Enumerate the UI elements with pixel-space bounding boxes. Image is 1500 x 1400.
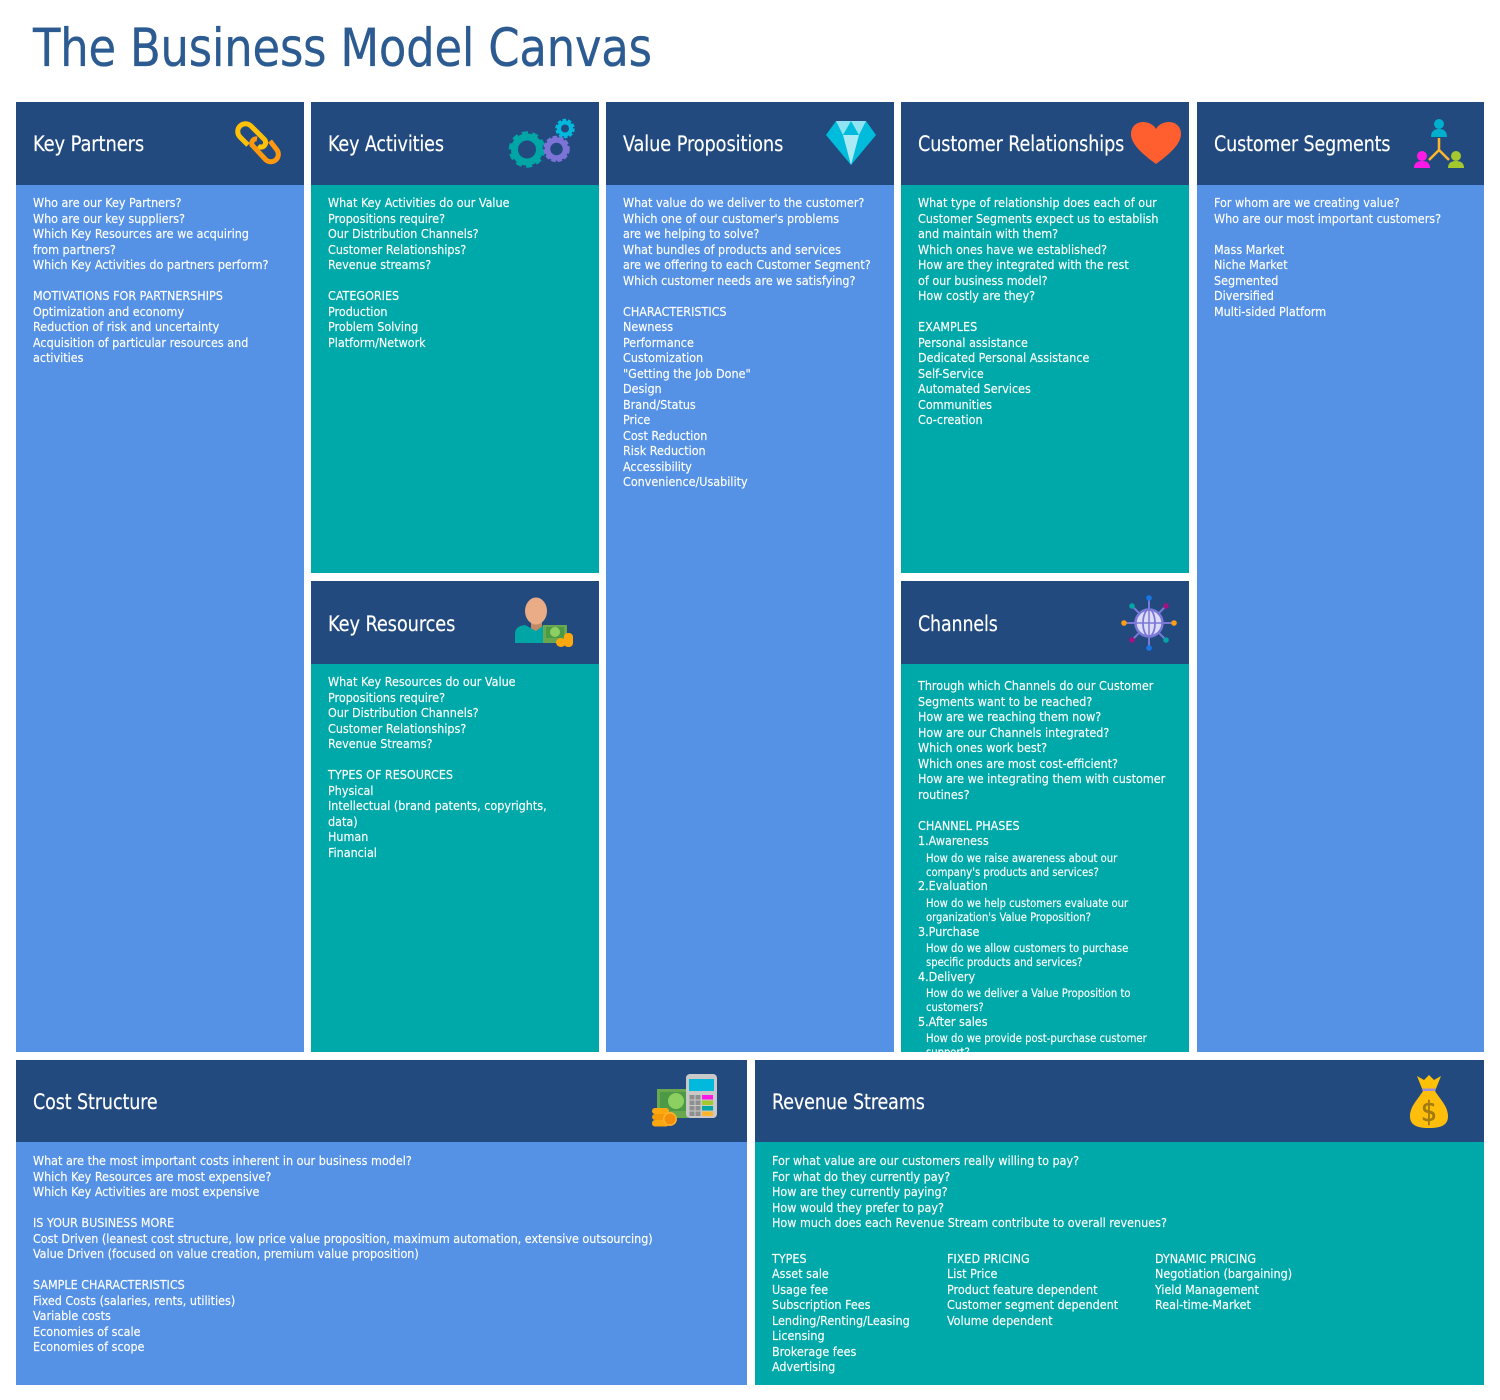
text: customer segments: For whom are we creating value? Who are our most important customers? Mass Market Niche Market Segmented Diversified Multi-sided Platform xyxy=(1214,195,1441,318)
header: customer relationships: Customer Relationships xyxy=(918,132,1124,156)
panel: key resources xyxy=(311,581,599,1052)
header: key resources xyxy=(311,581,599,664)
header: channels: Channels xyxy=(918,612,998,636)
header: cost structure xyxy=(16,1060,747,1142)
icon: calculator and money xyxy=(652,1074,717,1126)
text: phase 2 detail: How do we help customers evaluate our organization's Value Proposition? xyxy=(926,897,1128,924)
text: phase 5: 5.After sales xyxy=(918,1014,988,1029)
text: phase 3: 3.Purchase xyxy=(918,924,979,939)
header: key activities xyxy=(311,102,599,185)
panel: key activities xyxy=(311,102,599,573)
panel: value propositions xyxy=(606,102,894,1052)
header: cost structure: Cost Structure xyxy=(33,1090,158,1114)
panel: revenue streams xyxy=(755,1060,1484,1385)
header: key resources: Key Resources xyxy=(328,612,455,636)
header: value propositions xyxy=(606,102,894,185)
text: revenue types: TYPES Asset sale Usage fee Subscription Fees Lending/Renting/Leasing Licensing Brokerage fees Advertising xyxy=(772,1250,910,1374)
panel: key partners xyxy=(16,102,304,1052)
header: customer segments xyxy=(1197,102,1484,185)
text: phase 2: 2.Evaluation xyxy=(918,878,988,893)
icon: heart xyxy=(1131,122,1181,164)
header: key partners xyxy=(16,102,304,185)
text: key partners: Who are our Key Partners? Who are our key suppliers? Which Key Resources are we acquiring from partners? Which Key Activities do partners perform? MOTIVATIONS FOR PARTNERSHIPS Optimization and economy Reduction of risk and uncertainty Acquisition of particular resources and activities xyxy=(33,195,268,365)
text: value propositions: What value do we deliver to the customer? Which one of our customer's problems are we helping to solve? What bundles of products and services are we offering to each Customer Segment? Which customer needs are we satisfying? CHARACTERISTICS Newness Performance Customization "Getting the Job Done" Design Brand/Status Price Cost Reduction Risk Reduction Accessibility Convenience/Usability xyxy=(623,195,871,489)
header: value propositions: Value Propositions xyxy=(623,132,783,156)
header: revenue streams: Revenue Streams xyxy=(772,1090,925,1114)
text: dynamic pricing: DYNAMIC PRICING Negotiation (bargaining) Yield Management Real-time-Market xyxy=(1155,1250,1292,1312)
icon: globe network xyxy=(1121,595,1177,651)
text: phase 3 detail: How do we allow customers to purchase specific products and services? xyxy=(926,942,1128,969)
header: customer segments: Customer Segments xyxy=(1214,132,1390,156)
text: key resources: What Key Resources do our Value Propositions require? Our Distribution Channels? Customer Relationships? Revenue Streams? TYPES OF RESOURCES Physical Intellectual (brand patents, copyrights, data) Human Financial xyxy=(328,674,547,860)
panel: customer relationships xyxy=(901,102,1189,573)
icon: diamond xyxy=(826,121,876,165)
text: phase 4 detail: How do we deliver a Value Proposition to customers? xyxy=(926,987,1131,1014)
text: key activities: What Key Activities do our Value Propositions require? Our Distribution Channels? Customer Relationships? Revenue streams? CATEGORIES Production Problem Solving Platform/Network xyxy=(328,195,510,350)
icon: gears xyxy=(508,118,575,168)
text: channels questions: Through which Channels do our Customer Segments want to be reached? How are we reaching them now? How are our Channels integrated? Which ones work best? Which ones are most cost-efficient? How are we integrating them with customer routines? CHANNEL PHASES xyxy=(918,678,1165,832)
title: The Business Model Canvas xyxy=(33,18,652,79)
header: key activities: Key Activities xyxy=(328,132,444,156)
icon: money bag xyxy=(1410,1075,1448,1128)
text: phase 4: 4.Delivery xyxy=(918,969,975,984)
panel: channels xyxy=(901,581,1189,1052)
text: cost structure: What are the most important costs inherent in our business model? Which Key Resources are most expensive? Which Key Activities are most expensive IS YOUR BUSINESS MORE Cost Driven (leanest cost structure, low price value proposition, maximum automation, extensive outsourcing) Value Driven (focused on value creation, premium value proposition) SAMPLE CHARACTERISTICS Fixed Costs (salaries, rents, utilities) Variable costs Economies of scale Economies of scope xyxy=(33,1153,653,1354)
icon: person with money xyxy=(515,598,573,647)
header: customer relationships xyxy=(901,102,1189,185)
icon: people network xyxy=(1414,119,1464,168)
header: key partners: Key Partners xyxy=(33,132,144,156)
text: revenue questions: For what value are our customers really willing to pay? For what do they currently pay? How are they currently paying? How would they prefer to pay? How much does each Revenue Stream contribute to overall revenues? xyxy=(772,1153,1167,1230)
panel: cost structure xyxy=(16,1060,747,1385)
text: phase 1 detail: How do we raise awareness about our company's products and services? xyxy=(926,852,1117,879)
text: phase 1: 1.Awareness xyxy=(918,833,989,848)
panel: customer segments xyxy=(1197,102,1484,1052)
header: revenue streams xyxy=(755,1060,1484,1142)
text: fixed pricing: FIXED PRICING List Price Product feature dependent Customer segment dependent Volume dependent xyxy=(947,1250,1118,1328)
header: channels xyxy=(901,581,1189,664)
icon: chain link xyxy=(235,121,281,164)
icon: money bag: $ xyxy=(1421,1095,1437,1128)
text: customer relationships: What type of relationship does each of our Customer Segments expect us to establish and maintain with them? Which ones have we established? How are they integrated with the rest of our business model? How costly are they? EXAMPLES Personal assistance Dedicated Personal Assistance Self-Service Automated Services Communities Co-creation xyxy=(918,195,1158,427)
